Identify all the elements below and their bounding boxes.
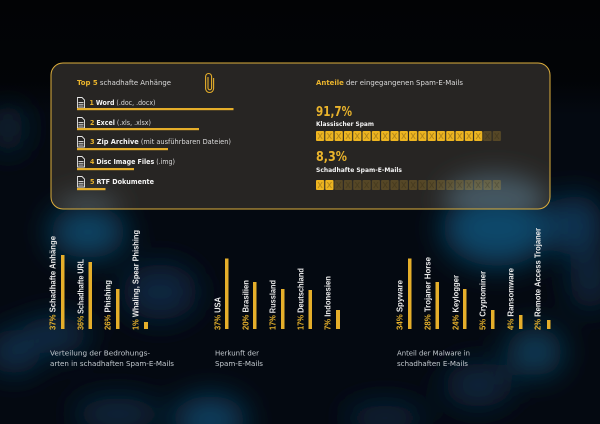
caption: Verteilung der Bedrohungs-	[50, 348, 150, 358]
bar: URL: 36% Schadhafte URL	[76, 259, 86, 330]
bar: whaling: 1% Whaling, Spear Phishing	[132, 230, 140, 330]
heading: top 5 attachments: Top 5 schadhafte Anhänge	[77, 79, 171, 87]
stat: malicious spam: 8,3%	[316, 149, 347, 165]
list row 3: Zip Archive: 3 Zip Archive (mit ausführbaren Dateien)	[90, 138, 231, 146]
bar: Deutschland: 17% Deutschland	[296, 268, 306, 330]
list row 1: Word: 1 Word (.doc, .docx)	[90, 99, 156, 107]
bar: USA: 37% USA	[214, 297, 222, 330]
chart: threat types	[48, 230, 174, 368]
bar: Trojaner Horse: 28% Trojaner Horse	[424, 257, 432, 330]
panel glows	[56, 174, 547, 226]
caption line 2: schadhaften E-Mails	[397, 359, 468, 368]
bar: Keylogger	[452, 274, 466, 330]
caption line 2: arten in schadhaften Spam-E-Mails	[50, 359, 174, 368]
bar: Trojaner Horse	[424, 257, 439, 330]
chart: origin	[214, 258, 340, 368]
stat: classic spam: 91,7%	[316, 104, 352, 120]
list row 5: RTF Dokumente: 5 RTF Dokumente	[90, 178, 154, 186]
bar: Keylogger: 24% Keylogger	[452, 274, 460, 330]
caption: Anteil der Malware in	[397, 348, 470, 358]
bar: phishing: 26% Phishing	[104, 280, 112, 330]
stat: malicious spam	[316, 149, 502, 190]
bar: Russland: 17% Russland	[268, 280, 278, 330]
panel: top summary	[51, 63, 550, 226]
caption: Herkunft der	[215, 348, 259, 358]
bar: Brasilien: 20% Brasilien	[242, 280, 250, 330]
stat: classic spam: Klassischer Spam	[316, 120, 374, 128]
panel outline	[51, 63, 550, 209]
icon: paperclip	[206, 74, 214, 92]
stat: classic spam	[316, 104, 502, 141]
bar: Ransomware: 4% Ransomware	[506, 268, 516, 330]
bar: attachments: 37% Schadhafte Anhänge	[48, 236, 58, 330]
bar: Indonesien: 7% Indonesien	[324, 276, 332, 330]
bar: Ransomware	[506, 268, 522, 330]
list row 2: Excel: 2 Excel (.xls, .xlsx)	[90, 119, 151, 127]
bar: Spyware	[396, 258, 412, 330]
stat: malicious spam: Schadhafte Spam-E-Mails	[316, 166, 402, 174]
bar: Remote Access Trojaner	[534, 227, 550, 330]
bar: Remote Access Trojaner: 2% Remote Access Trojaner	[534, 227, 542, 330]
list row 3: Zip Archive	[77, 136, 231, 150]
chart: malware	[396, 227, 550, 368]
list row 1: Word	[77, 98, 234, 110]
bar: Spyware: 34% Spyware	[396, 280, 404, 330]
list row 4: Disc Image Files: 4 Disc Image Files (.img)	[90, 158, 175, 166]
list row 4: Disc Image Files	[77, 156, 175, 170]
caption line 2: Spam-E-Mails	[215, 359, 263, 368]
bar: Cryptominer	[478, 270, 494, 330]
list row 2: Excel	[77, 118, 199, 130]
list row 5: RTF Dokumente	[77, 176, 154, 190]
heading: spam shares: Anteile der eingegangenen Spam-E-Mails	[316, 79, 463, 87]
bar: Cryptominer: 5% Cryptominer	[478, 270, 488, 330]
